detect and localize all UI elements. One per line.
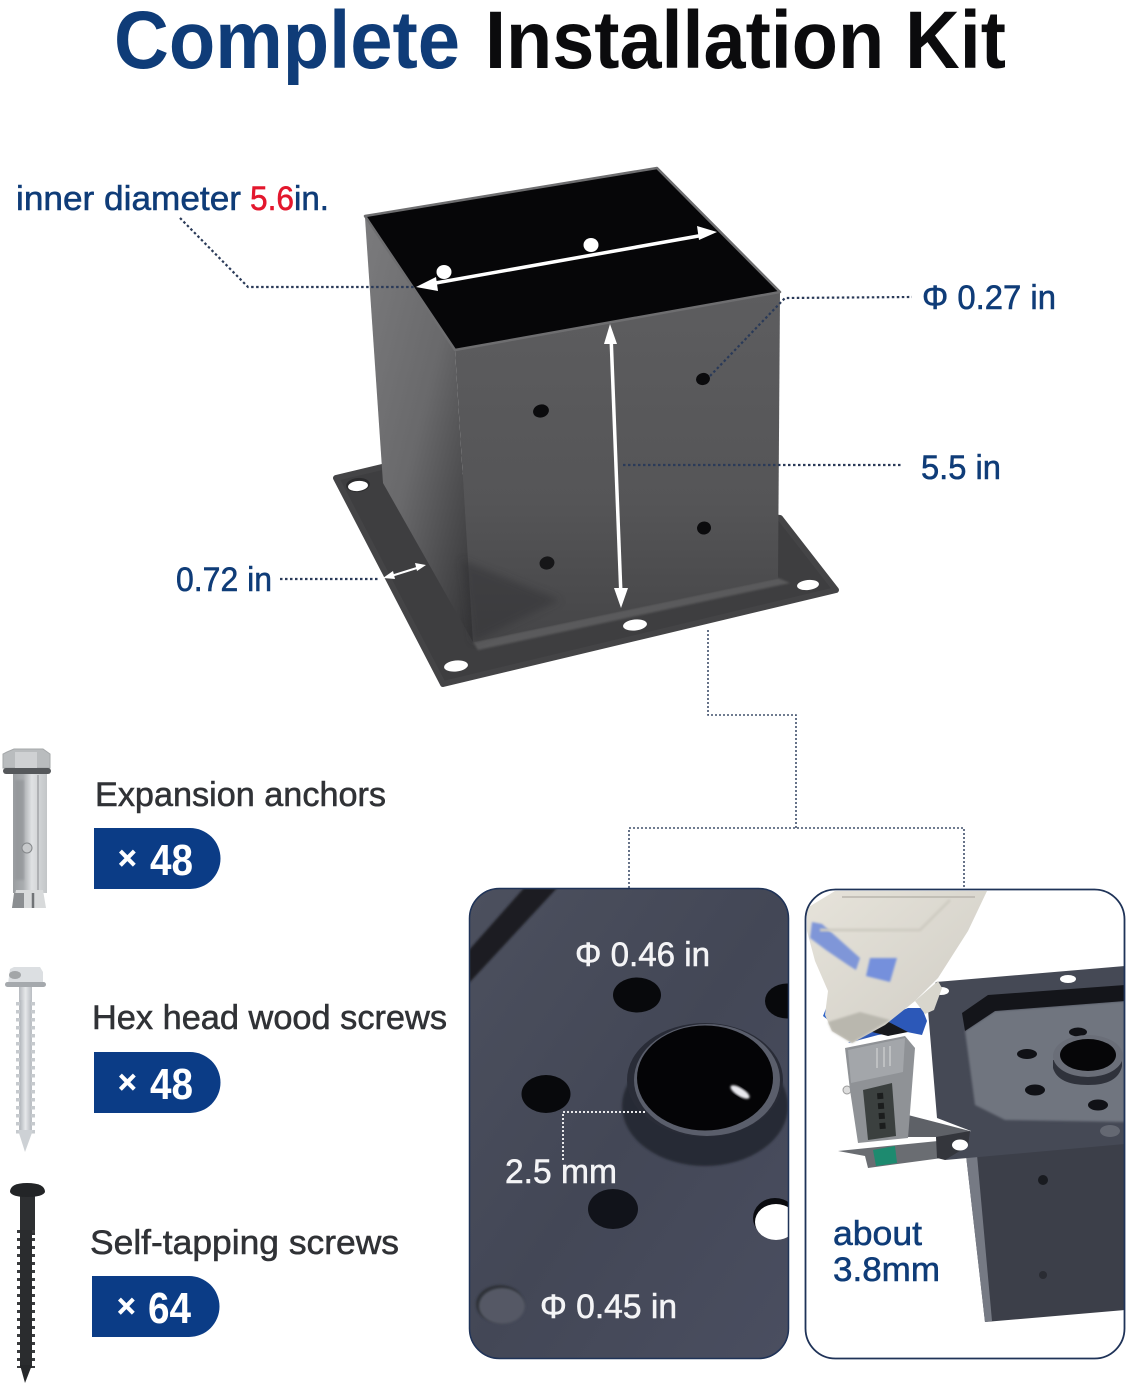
badge: x 48: ×: [118, 840, 137, 876]
badge: x 64: [92, 1276, 220, 1337]
item: expansion anchors: [3, 749, 386, 908]
callout: height 5.5: 5.5 in: [921, 449, 1001, 487]
glove: [807, 891, 987, 1043]
small holes: [522, 978, 809, 1229]
badge: x 64: ×: [117, 1288, 136, 1324]
callout: hole diameter 0.27: Φ 0.27 in: [922, 279, 1056, 317]
callout: hole diameter 0.27: [710, 279, 1056, 376]
label: 2.5 mm: 2.5 mm: [505, 1153, 617, 1191]
badge: x 64: 64: [148, 1284, 191, 1333]
item: hex head wood screws: [5, 967, 447, 1152]
callout: inner diameter: inner diameter: [16, 180, 241, 218]
recess edge: [469, 888, 557, 983]
arrow: height: [604, 324, 628, 608]
label: 0.45: Φ 0.45 in: [540, 1288, 677, 1326]
label: 0.46: Φ 0.46 in: [575, 936, 710, 974]
badge: x 48: 48: [150, 836, 193, 885]
bracket front face: [455, 292, 780, 642]
label: about 3.8mm: 3.8mm: [833, 1251, 940, 1289]
white through-hole: [753, 1198, 788, 1240]
flange plate: [927, 966, 1125, 1160]
label: Expansion anchors: [95, 776, 386, 814]
icon: black screw: [10, 1183, 45, 1383]
plug: [476, 1285, 525, 1324]
label: Self-tapping screws: [90, 1224, 399, 1262]
lower box: [966, 1135, 1125, 1322]
label: about 3.8mm: about: [833, 1215, 923, 1253]
label: Hex head wood screws: [92, 999, 447, 1037]
badge: x 48: [94, 828, 220, 889]
icon: expansion anchor: [3, 749, 51, 908]
dimension guide: [563, 1112, 646, 1160]
icon: hex screw: [5, 967, 46, 1152]
item: self-tapping screws: [10, 1183, 399, 1383]
connector lines to detail photos: [629, 630, 964, 888]
badge: x 48: [94, 1052, 220, 1113]
badge: x 48: 48: [150, 1060, 193, 1109]
arrow: flange width: [383, 563, 426, 579]
caliper: [838, 1036, 970, 1168]
bracket left side: [365, 218, 473, 642]
panel: caliper measurement photo: [805, 889, 1125, 1359]
label: about 3.8mm: [833, 1215, 940, 1289]
base plate: [336, 467, 836, 684]
callout: inner diameter: 5.6: [250, 180, 294, 218]
panel: base plate close-up: [469, 888, 809, 1359]
arrow: inner width: [416, 226, 717, 291]
product: post base bracket: [336, 168, 836, 684]
callout: inner diameter: [16, 180, 415, 287]
bracket interior: [365, 168, 780, 350]
badge: x 48: ×: [118, 1064, 137, 1100]
title: [114, 0, 1006, 86]
callout: inner diameter: in.: [294, 180, 329, 218]
callout: flange 0.72: 0.72 in: [176, 561, 272, 599]
central tube: [622, 1023, 788, 1166]
